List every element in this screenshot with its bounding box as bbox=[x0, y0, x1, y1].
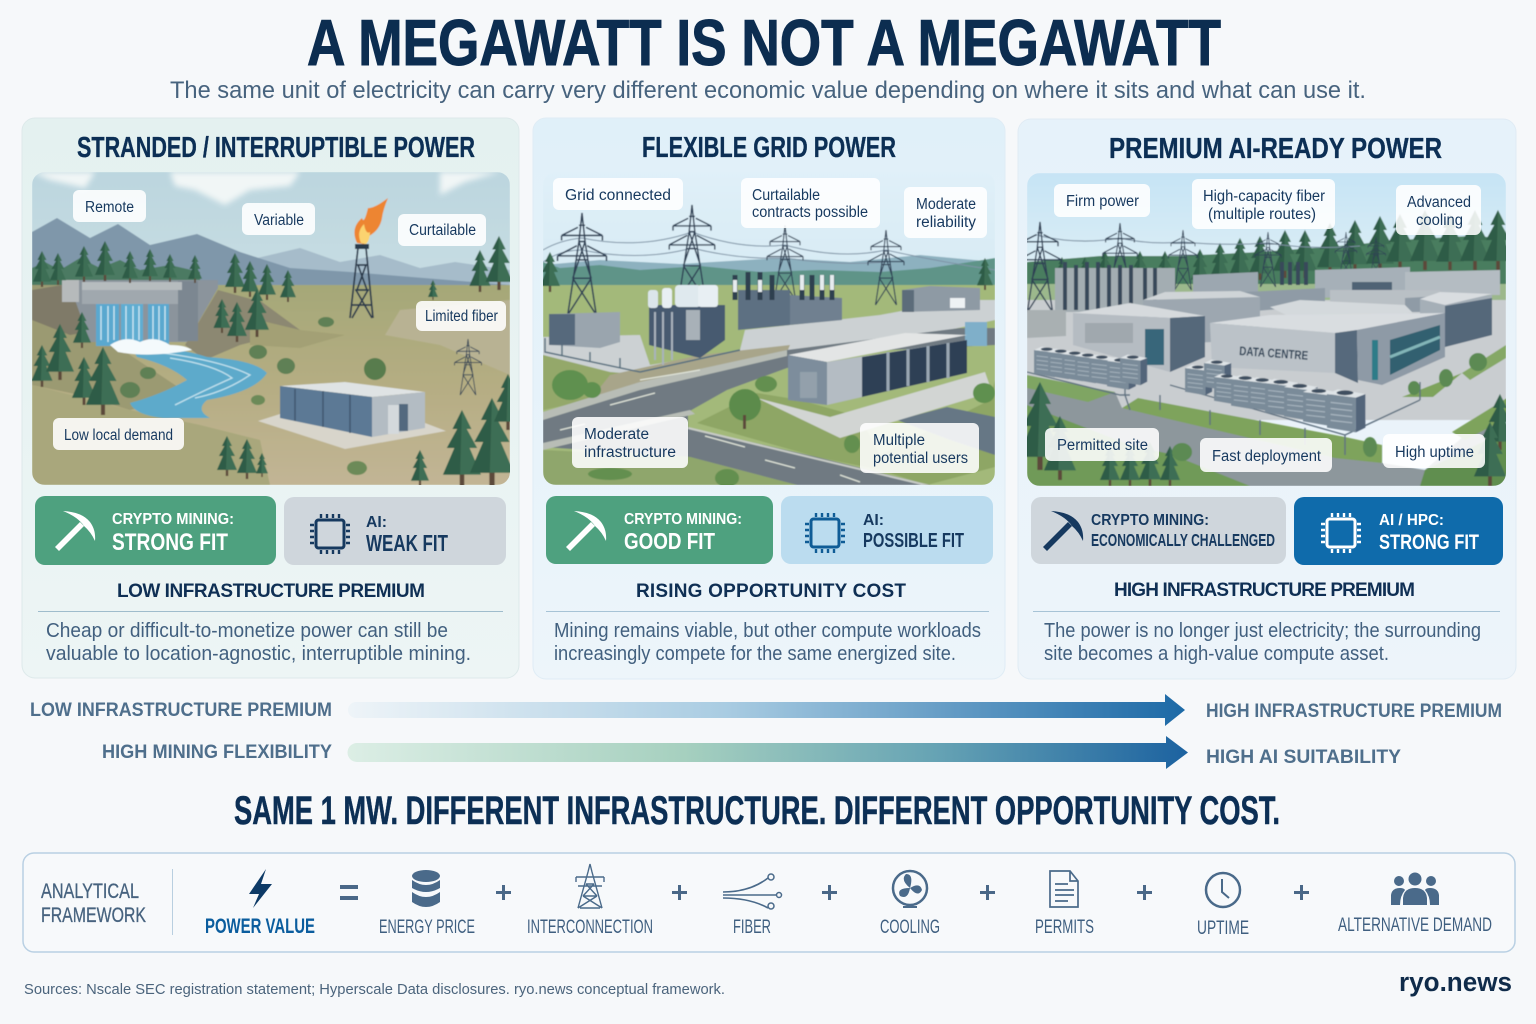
subtitle: The same unit of electricity can carry very different economic value depending on where it sits and what can use it. bbox=[170, 77, 1366, 104]
term: permits: PERMITS bbox=[1035, 917, 1094, 938]
conifers and shrubs bbox=[32, 236, 522, 486]
panel: flexible grid power bbox=[533, 118, 1005, 679]
badge: crypto mining economically challenged: CRYPTO MINING: bbox=[1091, 512, 1209, 529]
spectrum: mining flexibility to AI suitability: HIGH MINING FLEXIBILITY bbox=[102, 741, 332, 763]
building lettering: DATA CENTRE bbox=[1239, 344, 1309, 363]
callout: moderate infrastructure: Moderate bbox=[584, 426, 649, 443]
badge: AI weak fit: WEAK FIT bbox=[366, 530, 448, 556]
flare stack bbox=[350, 198, 388, 318]
illustration: remote hydro dam, flare and container bbox=[32, 172, 522, 486]
badge: crypto mining economically challenged bbox=[1031, 497, 1286, 564]
term: fiber: FIBER bbox=[733, 917, 771, 938]
transformers bbox=[545, 272, 987, 372]
icon: chip bbox=[805, 513, 845, 553]
heading: premium AI-ready power: PREMIUM AI-READY POWER bbox=[1109, 133, 1442, 165]
callout: grid connected bbox=[553, 178, 683, 210]
callout: permitted site: Permitted site bbox=[1057, 437, 1148, 454]
callout: advanced cooling: cooling bbox=[1416, 212, 1463, 229]
callout: high-capacity fiber bbox=[1192, 179, 1335, 229]
modular container bbox=[258, 414, 446, 449]
description: flexible power: increasingly compete for the same energized site. bbox=[554, 643, 956, 665]
panel: premium AI-ready power bbox=[1018, 119, 1516, 679]
callout: low local demand bbox=[53, 418, 184, 450]
plus bbox=[1294, 885, 1309, 900]
callout: low local demand: Low local demand bbox=[64, 427, 173, 444]
pylons bbox=[558, 213, 606, 315]
callout: variable: Variable bbox=[254, 212, 304, 229]
subheading: low infrastructure premium: LOW INFRASTRUCTURE PREMIUM bbox=[117, 581, 425, 602]
term: permits bbox=[1035, 871, 1094, 938]
callout: curtailable: Curtailable bbox=[409, 222, 476, 239]
sources: Sources: Nscale SEC registration statement; Hyperscale Data disclosures. ryo.news conceptual framework. bbox=[24, 981, 725, 998]
callout: curtailable contracts possible: contracts possible bbox=[752, 204, 868, 221]
badge: AI / HPC strong fit bbox=[1294, 497, 1503, 565]
panel: analytical framework bbox=[23, 853, 1515, 952]
framework label: ANALYTICAL bbox=[41, 880, 139, 903]
rear buildings bbox=[1143, 267, 1500, 347]
badge: AI possible fit: POSSIBLE FIT bbox=[863, 530, 964, 552]
illustration: grid substation and containers bbox=[543, 204, 995, 485]
term: fiber bbox=[723, 874, 782, 938]
lines bbox=[543, 232, 995, 270]
forest band bbox=[1055, 210, 1513, 285]
pads bbox=[543, 300, 995, 382]
callout: remote bbox=[73, 190, 146, 222]
spectrum: infrastructure premium: HIGH INFRASTRUCTURE PREMIUM bbox=[1206, 700, 1502, 722]
framework label: FRAMEWORK bbox=[41, 904, 146, 927]
description: premium power: The power is no longer just electricity; the surrounding bbox=[1044, 620, 1481, 642]
icon: chip bbox=[310, 514, 350, 554]
left hall bbox=[1073, 303, 1205, 372]
term: cooling bbox=[880, 871, 940, 938]
description: flexible power: Mining remains viable, but other compute workloads bbox=[554, 620, 981, 642]
description: stranded power: Cheap or difficult-to-monetize power can still be bbox=[46, 620, 448, 642]
heading: flexible grid power: FLEXIBLE GRID POWER bbox=[642, 132, 896, 164]
substation bbox=[1027, 262, 1306, 338]
small pylon bbox=[455, 339, 481, 395]
icon: lightning bolt bbox=[249, 869, 272, 908]
term: interconnection: INTERCONNECTION bbox=[527, 917, 653, 938]
callout: moderate reliability: reliability bbox=[916, 214, 976, 231]
label: power value: POWER VALUE bbox=[205, 915, 315, 938]
spectrum: infrastructure premium bbox=[30, 694, 1502, 726]
description: stranded power bbox=[46, 620, 471, 665]
callout: high-capacity fiber: (multiple routes) bbox=[1208, 206, 1316, 223]
callout: grid connected: Grid connected bbox=[565, 187, 671, 204]
icon: pickaxe bbox=[1043, 511, 1083, 551]
spectrum: mining flexibility to AI suitability bbox=[102, 736, 1401, 769]
badge: AI weak fit bbox=[284, 497, 506, 565]
callout: advanced cooling bbox=[1396, 185, 1481, 235]
description: premium power: site becomes a high-value compute asset. bbox=[1044, 643, 1389, 665]
badge: AI possible fit bbox=[781, 496, 993, 564]
callout: permitted site bbox=[1045, 428, 1159, 461]
badge: crypto mining strong fit: STRONG FIT bbox=[112, 529, 228, 556]
badge: crypto mining good fit: CRYPTO MINING: bbox=[624, 511, 742, 528]
transmission lines bbox=[1027, 235, 1360, 247]
description: stranded power: valuable to location-agnostic, interruptible mining. bbox=[46, 643, 471, 665]
cooling units bbox=[1034, 347, 1365, 432]
plus bbox=[822, 885, 837, 900]
grass and tan ground by road bbox=[543, 355, 620, 410]
callout: multiple potential users: Multiple bbox=[873, 432, 925, 449]
icon: chip bbox=[1321, 513, 1361, 553]
callout: limited fiber bbox=[416, 301, 506, 331]
badge: crypto mining strong fit: CRYPTO MINING: bbox=[112, 511, 234, 528]
term: uptime bbox=[1197, 873, 1249, 939]
badge: crypto mining economically challenged: ECONOMICALLY CHALLENGED bbox=[1091, 530, 1275, 550]
callout: curtailable contracts possible bbox=[741, 178, 880, 228]
modular data container bbox=[757, 333, 992, 438]
callout: fast deployment bbox=[1200, 438, 1332, 472]
road and grounds bbox=[1027, 388, 1506, 486]
plus bbox=[672, 885, 687, 900]
badge: crypto mining good fit: GOOD FIT bbox=[624, 528, 715, 554]
description: premium power bbox=[1044, 620, 1481, 665]
callout: curtailable contracts possible: Curtailable bbox=[752, 187, 820, 204]
term: energy price: ENERGY PRICE bbox=[379, 917, 475, 938]
badge: crypto mining good fit bbox=[546, 496, 773, 564]
callout: limited fiber: Limited fiber bbox=[425, 308, 498, 325]
heading: stranded power: STRANDED / INTERRUPTIBLE POWER bbox=[77, 132, 475, 164]
arrow: mining flexibility to AI suitability bbox=[348, 736, 1188, 769]
callout: moderate reliability: Moderate bbox=[916, 196, 976, 213]
callout: high-capacity fiber: High-capacity fiber bbox=[1203, 188, 1325, 205]
callout: moderate infrastructure: infrastructure bbox=[584, 444, 676, 461]
callout: firm power bbox=[1054, 184, 1150, 217]
arrow: low to high infrastructure premium bbox=[348, 694, 1185, 726]
badge: AI / HPC strong fit: AI / HPC: bbox=[1379, 512, 1444, 529]
spectrum: mining flexibility to AI suitability: HIGH AI SUITABILITY bbox=[1206, 746, 1401, 768]
road network bbox=[543, 328, 995, 485]
icon: pickaxe bbox=[55, 511, 95, 551]
badge: AI / HPC strong fit: STRONG FIT bbox=[1379, 531, 1479, 554]
term: cooling: COOLING bbox=[880, 917, 940, 938]
dam bbox=[62, 280, 218, 342]
callout: firm power: Firm power bbox=[1066, 193, 1139, 210]
callout: high uptime bbox=[1383, 434, 1485, 468]
badge: AI weak fit: AI: bbox=[366, 514, 387, 531]
plus bbox=[980, 885, 995, 900]
callout: high uptime: High uptime bbox=[1395, 444, 1474, 461]
lower left grass bbox=[543, 450, 797, 485]
callout: fast deployment: Fast deployment bbox=[1212, 448, 1322, 465]
badge: AI possible fit: AI: bbox=[863, 512, 884, 529]
plus bbox=[496, 885, 511, 900]
callout: variable bbox=[242, 203, 315, 235]
equals sign bbox=[340, 885, 358, 900]
subheading: high infrastructure premium: HIGH INFRASTRUCTURE PREMIUM bbox=[1114, 580, 1415, 601]
brand: ryo.news: ryo.news bbox=[1399, 967, 1512, 997]
term: uptime: UPTIME bbox=[1197, 918, 1249, 939]
title: A MEGAWATT IS NOT A MEGAWATT bbox=[307, 6, 1221, 79]
callout: advanced cooling: Advanced bbox=[1407, 194, 1471, 211]
DATA CENTRE main hall bbox=[1210, 313, 1445, 385]
river bbox=[130, 349, 267, 418]
icon: pickaxe bbox=[566, 511, 606, 551]
description: flexible power bbox=[554, 620, 981, 665]
callout: multiple potential users bbox=[860, 423, 979, 473]
term: alternative demand bbox=[1338, 872, 1492, 936]
framework label bbox=[41, 880, 146, 927]
callout: curtailable bbox=[398, 214, 486, 246]
callout: moderate reliability bbox=[904, 187, 987, 238]
badge: crypto mining strong fit bbox=[35, 496, 276, 565]
subheading: rising opportunity cost: RISING OPPORTUNITY COST bbox=[636, 581, 906, 602]
callout: multiple potential users: potential users bbox=[873, 450, 968, 467]
panel: stranded / interruptible power bbox=[22, 118, 522, 678]
spectrum: infrastructure premium: LOW INFRASTRUCTURE PREMIUM bbox=[30, 699, 332, 721]
callout: moderate infrastructure bbox=[572, 417, 688, 468]
term: energy price bbox=[379, 870, 475, 938]
central island bbox=[697, 380, 995, 485]
term: interconnection bbox=[527, 864, 653, 938]
callout: remote: Remote bbox=[85, 199, 134, 216]
plus bbox=[1137, 885, 1152, 900]
illustration: data centre campus bbox=[1018, 173, 1514, 486]
